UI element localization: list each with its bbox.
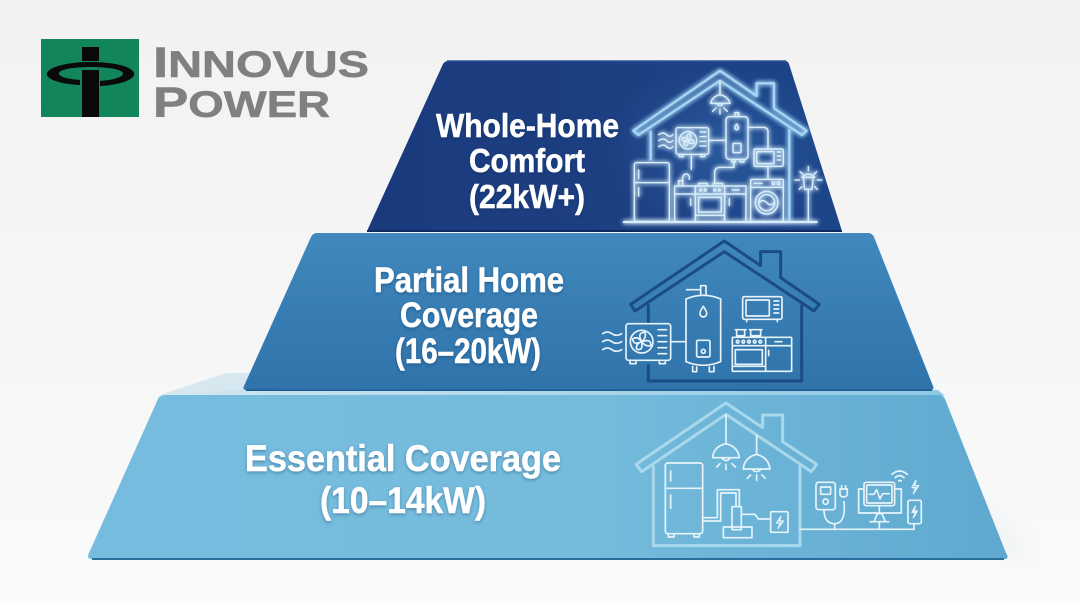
heading: Essential Coverage — [245, 438, 561, 521]
tier: Partial Home Coverage — [243, 233, 934, 391]
heading: Whole-Home Comfort — [436, 107, 619, 215]
logo wordmark: POWER — [153, 79, 330, 127]
heading: Partial Home Coverage: Coverage — [400, 296, 538, 335]
infographic: coverage pyramid — [41, 39, 1008, 560]
heading: Whole-Home Comfort: Whole-Home — [436, 107, 619, 144]
heading: Essential Coverage: (10–14kW) — [320, 480, 486, 521]
logo wordmark — [153, 39, 369, 127]
tier: Whole-Home Comfort — [367, 61, 842, 235]
icon: essential loads house — [636, 403, 921, 546]
heading: Partial Home Coverage: Partial Home — [374, 261, 564, 300]
heading: Whole-Home Comfort: Comfort — [469, 142, 585, 179]
logo mark — [41, 39, 139, 117]
heading: Essential Coverage: Essential Coverage — [245, 438, 561, 479]
heading: Partial Home Coverage: (16–20kW) — [395, 332, 541, 371]
icon: partial home house — [603, 241, 819, 381]
heading: Whole-Home Comfort: (22kW+) — [469, 178, 585, 215]
logo wordmark: INNOVUS — [153, 39, 369, 87]
icon: whole-home glowing house — [624, 71, 822, 222]
logo: Innovus Power — [41, 39, 369, 127]
heading: Partial Home Coverage — [374, 261, 564, 371]
tier: Essential Coverage — [88, 373, 1008, 560]
